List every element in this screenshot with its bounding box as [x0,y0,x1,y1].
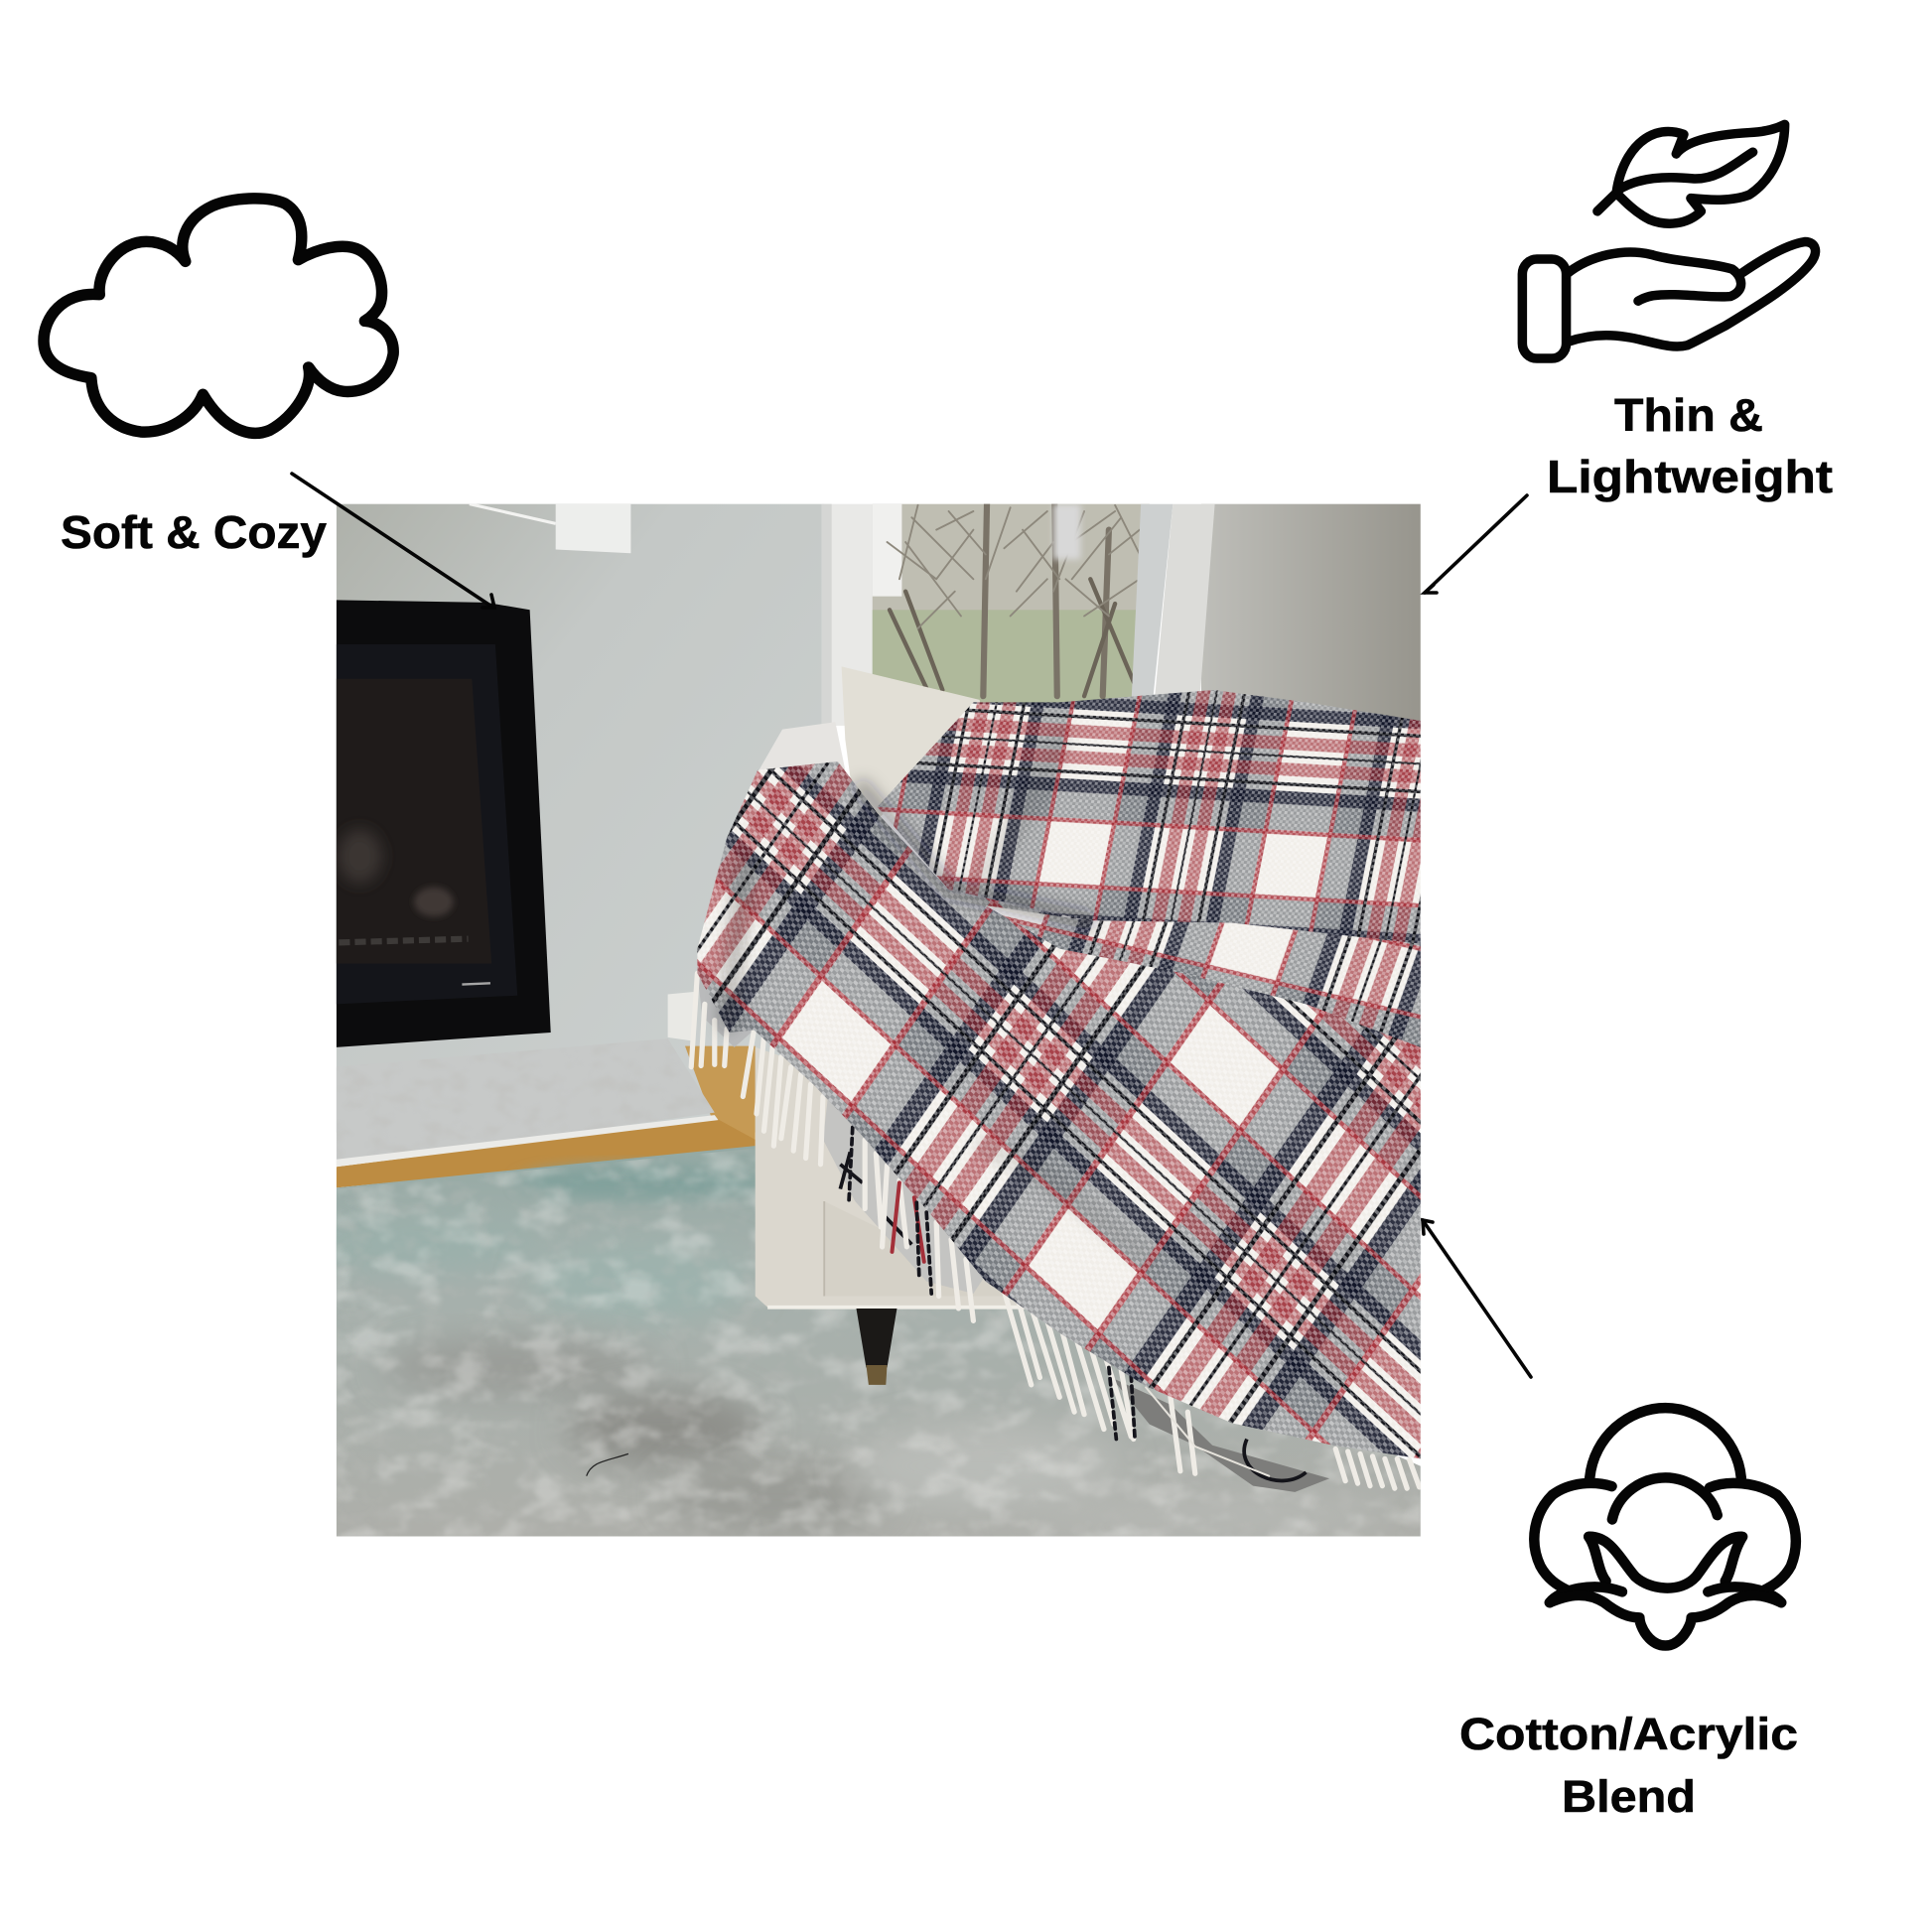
blanket underside fold [697,961,1329,1492]
wall left [337,504,824,1132]
blanket fold shading [727,740,1146,1257]
label: Thin & Lightweight: Lightweight [1547,451,1833,502]
blanket upper drape [878,690,1421,944]
icon: feather above open hand [1522,124,1816,358]
fireplace [337,600,551,1047]
arrow: cotton blend [1423,1220,1531,1377]
pillow [842,666,986,819]
window frame [822,504,1215,727]
blanket lower drape [697,761,1421,1458]
wood floor [337,1046,756,1187]
label: Soft & Cozy: Soft & Cozy [61,506,327,558]
sofa leg [856,1309,897,1385]
icon: cloud [44,199,393,433]
hand [1522,242,1816,358]
icon: cotton boll [1534,1408,1796,1646]
photo: plaid blanket draped on sofa [296,504,1421,1540]
label: Thin & Lightweight: Thin & [1614,389,1763,441]
sofa base [755,1047,1026,1310]
sofa arm [759,723,846,770]
arrow: soft and cozy [292,474,494,608]
leaf vein [1618,152,1753,190]
label: Cotton/Acrylic Blend [1459,1709,1798,1822]
wall right [1201,504,1421,738]
hearth stone [337,1038,719,1167]
wall bracket [470,504,630,553]
rug [296,1146,1421,1540]
baseboard [668,992,694,1041]
blanket fringe [691,973,1420,1488]
arrow: thin and lightweight [1425,495,1527,593]
blanket middle band [986,905,1421,1047]
label: Cotton/Acrylic Blend: Cotton/Acrylic [1459,1709,1798,1759]
leaf [1597,124,1785,223]
window view [873,504,1150,715]
label: Thin & Lightweight [1547,389,1833,502]
label: Cotton/Acrylic Blend: Blend [1562,1771,1696,1822]
